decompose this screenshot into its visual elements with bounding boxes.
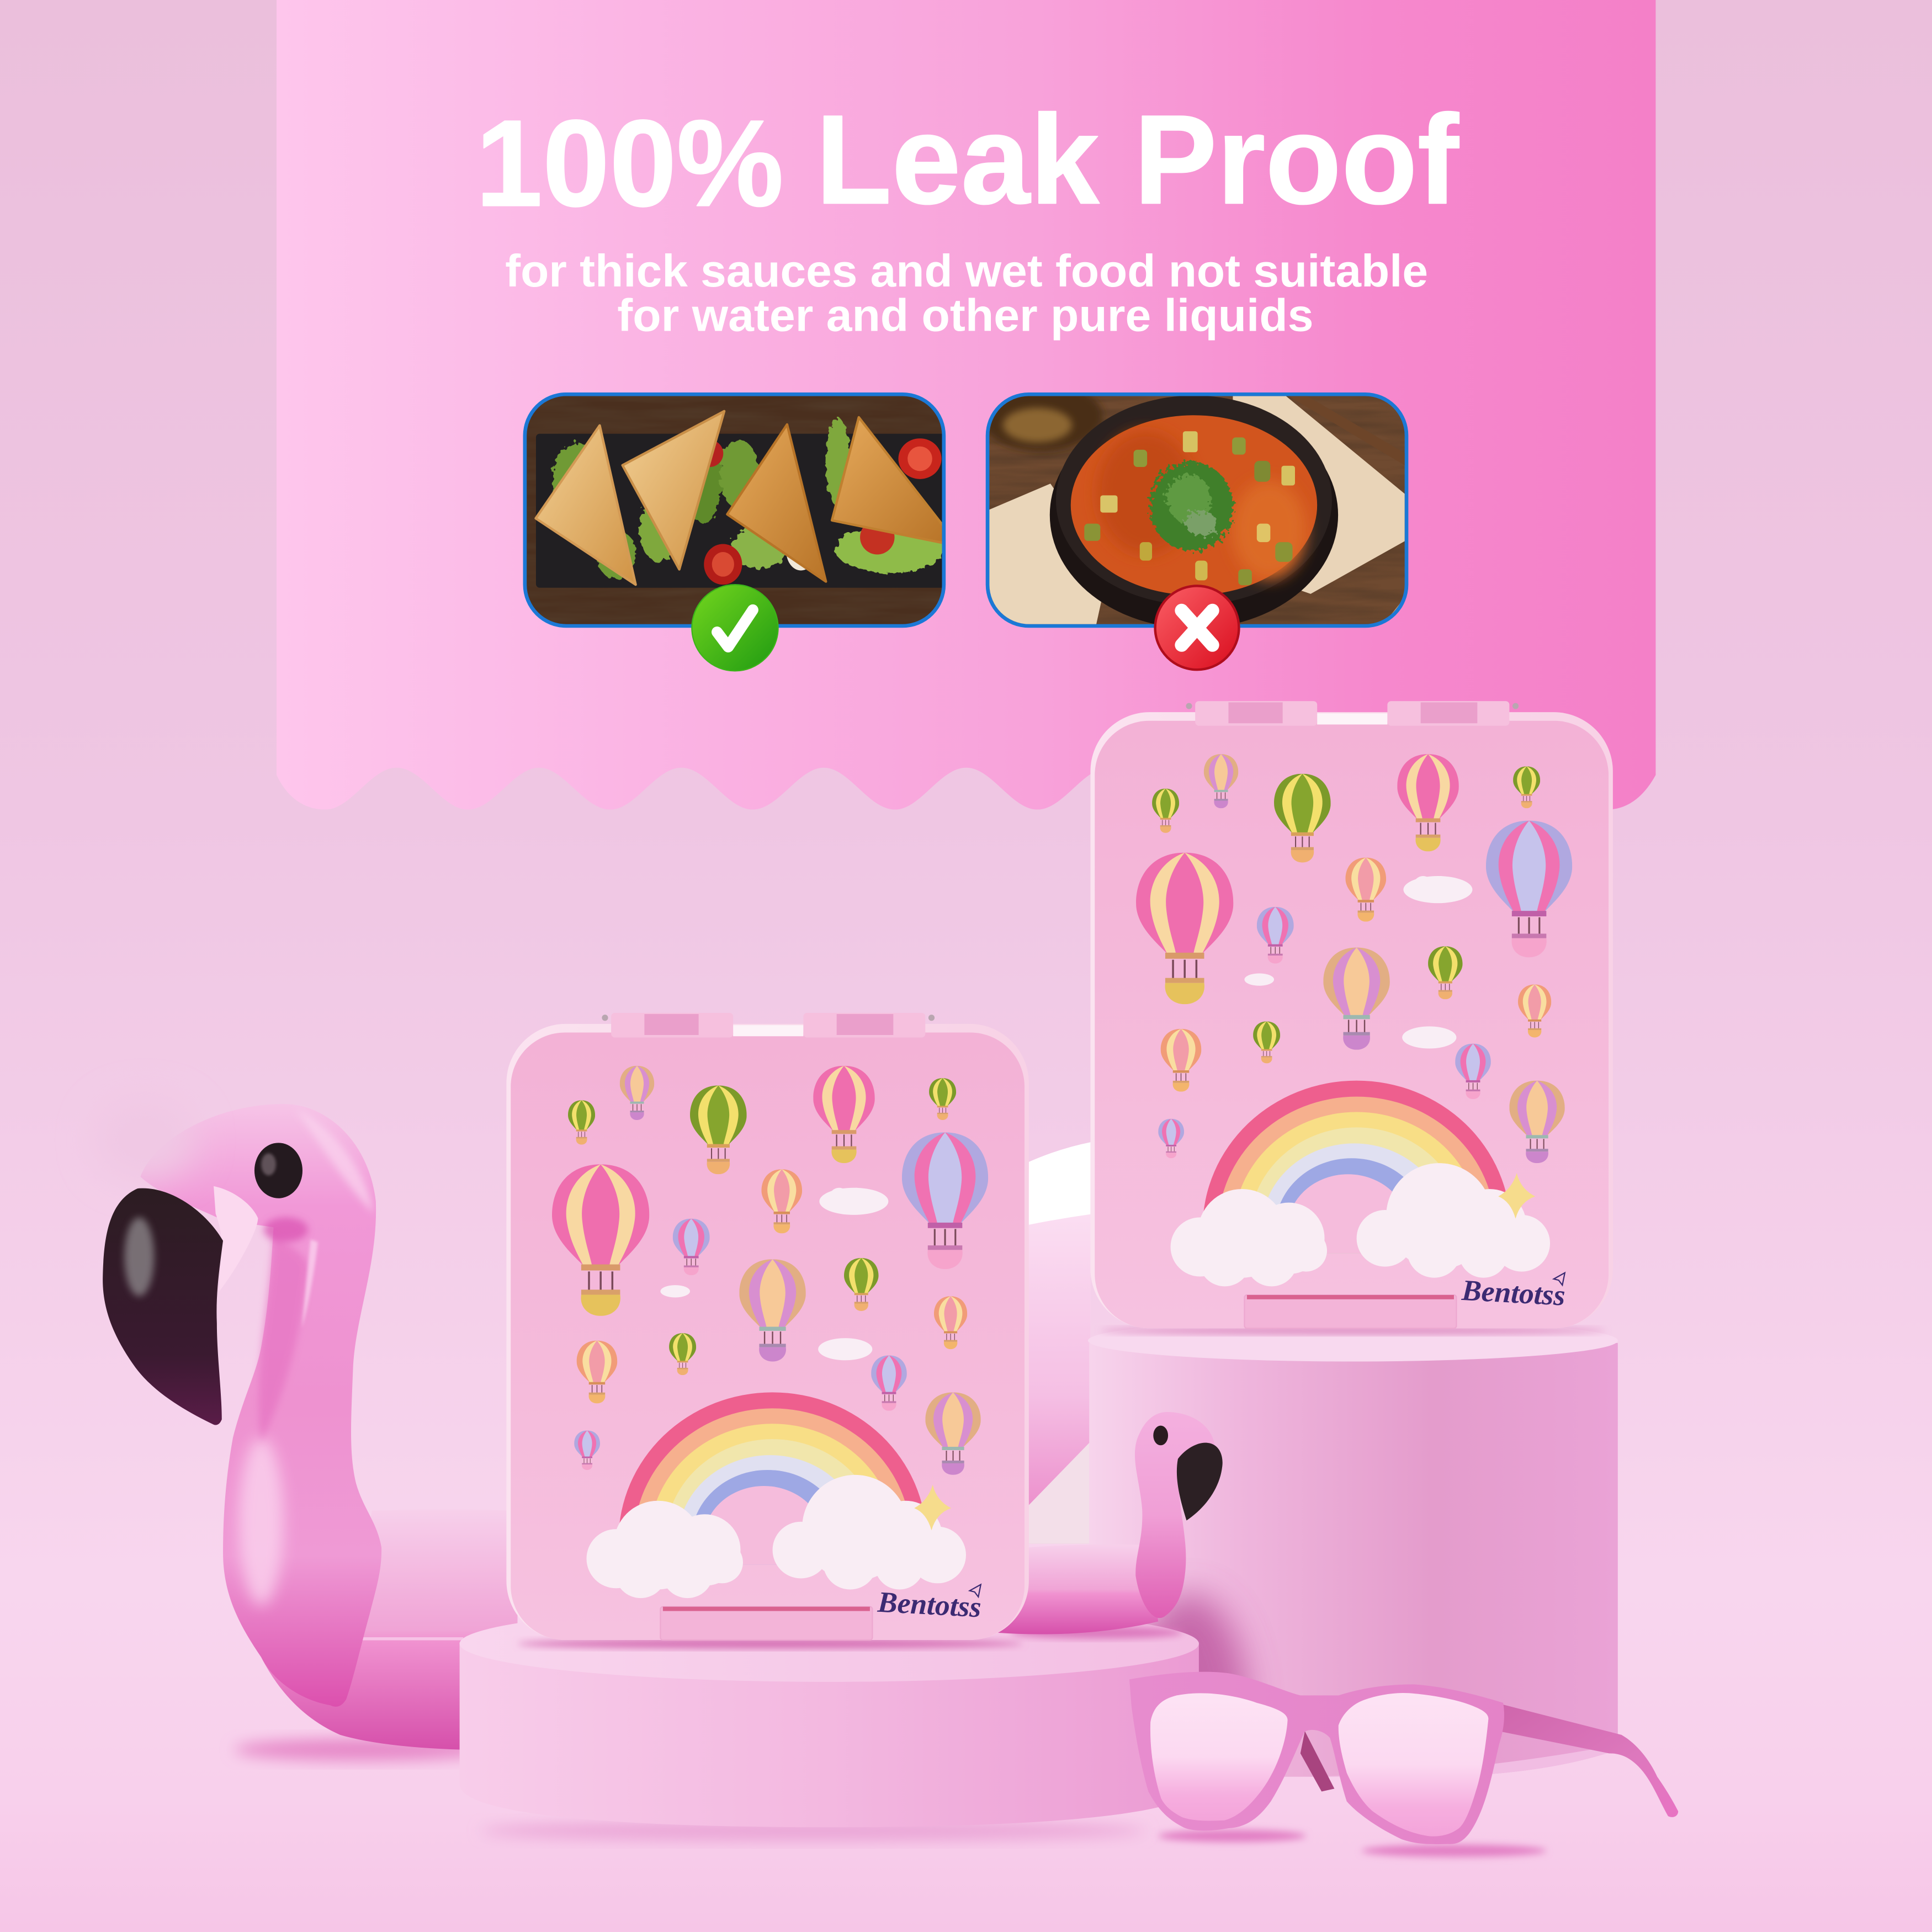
drip banner xyxy=(277,0,1655,810)
large clouds xyxy=(586,1475,966,1598)
box lid xyxy=(511,1033,1025,1640)
lunch box: right xyxy=(1090,701,1613,1376)
neck highlight xyxy=(239,1438,283,1605)
beak highlight xyxy=(124,1217,154,1296)
small flamingo eye xyxy=(1153,1426,1168,1445)
small flamingo beak xyxy=(1177,1443,1223,1520)
small clouds xyxy=(660,1188,888,1360)
head fade into background xyxy=(94,1098,197,1182)
star xyxy=(914,1485,951,1530)
photo: soup (not suitable) xyxy=(980,382,1410,628)
icon: green check xyxy=(692,585,778,671)
left lens xyxy=(1150,1693,1288,1820)
banner subtitle: for thick sauces and wet food not suitable xyxy=(505,246,1428,296)
far temple xyxy=(1301,1731,1334,1792)
neck shadow xyxy=(259,1232,308,1442)
latch xyxy=(660,1607,872,1640)
balloons xyxy=(552,1066,988,1475)
banner heading xyxy=(476,88,1459,232)
small float ring xyxy=(996,1544,1158,1634)
banner subtitle: for water and other pure liquids xyxy=(617,290,1313,341)
icon: red cross xyxy=(1155,586,1239,670)
neck stripe highlight xyxy=(302,1240,318,1328)
right lens xyxy=(1339,1693,1488,1837)
sunglasses xyxy=(1129,1672,1678,1844)
back cylinder pedestal xyxy=(1088,1334,1618,1777)
shadow under left lunch box xyxy=(518,1639,1023,1649)
ring floor shadow xyxy=(234,1739,493,1761)
logo plane xyxy=(970,1585,981,1597)
throat shadow xyxy=(264,1217,308,1242)
eye xyxy=(254,1143,302,1198)
small flamingo neck xyxy=(1135,1412,1215,1618)
box hinges xyxy=(602,1013,935,1037)
small float shadow xyxy=(1010,1626,1183,1639)
head and neck xyxy=(140,1104,381,1707)
near temple xyxy=(1501,1705,1678,1817)
box shell xyxy=(506,1024,1029,1640)
banner heading: Leak Proof xyxy=(816,88,1459,230)
back of flamingo ring between boxes xyxy=(1024,1142,1090,1544)
big flamingo ring xyxy=(261,1509,518,1750)
big flamingo xyxy=(94,1098,381,1707)
photo: sandwiches (suitable) xyxy=(522,392,949,628)
head highlight xyxy=(296,1109,373,1214)
brand text: Bentotss xyxy=(877,1585,982,1623)
lunch box: left xyxy=(506,1013,1029,1688)
front pedestal floor shadow xyxy=(481,1821,1146,1841)
brand text: Bentotss xyxy=(1461,1273,1566,1312)
sunglasses floor shadow xyxy=(1158,1830,1546,1857)
front cylinder pedestal xyxy=(460,1605,1199,1827)
frame xyxy=(1129,1672,1504,1844)
banner subtitle xyxy=(505,246,1428,341)
small flamingo float xyxy=(996,1412,1223,1639)
beak xyxy=(103,1188,223,1425)
eye highlight xyxy=(261,1153,276,1175)
shadow under right lunch box xyxy=(1100,1327,1605,1334)
pale snout xyxy=(214,1186,258,1291)
rainbow xyxy=(619,1392,927,1688)
banner heading: 100% xyxy=(476,95,784,232)
